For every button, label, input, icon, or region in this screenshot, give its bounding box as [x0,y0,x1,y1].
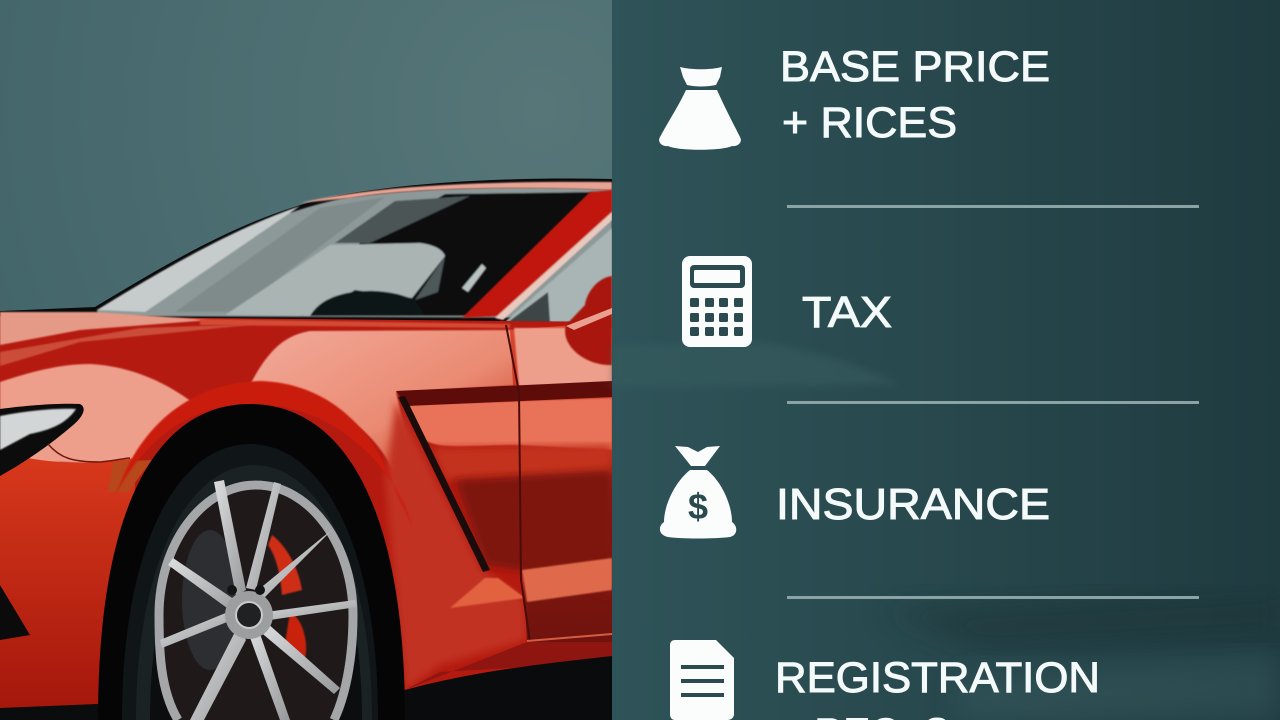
sill [405,642,612,690]
row: insurance [660,446,1050,538]
spokes [160,480,357,720]
tire [122,444,378,720]
door [510,322,612,650]
body base [0,316,612,710]
wheel arch outer [115,381,412,525]
door stripe [396,381,612,406]
heading: base price: BASE PRICE [780,43,1050,91]
car body [0,312,612,720]
fender [250,330,520,540]
side vent line [398,396,490,572]
ghost car reflection [612,342,900,388]
row: base price [659,43,1050,150]
right panel [612,0,1280,720]
headlight [0,404,152,492]
row: tax [682,256,892,347]
icon: money bag [660,446,736,538]
wheel arch [98,404,405,720]
brake caliper [268,535,302,595]
car photo [0,179,612,720]
rear lower fender [385,400,527,690]
ground shadow [0,704,98,720]
brake disc [182,530,238,670]
text: + rices: + RICES [782,99,957,147]
rim [164,564,348,690]
icon: document [670,640,734,720]
dollar sign: $ [688,486,708,527]
bumper vent [0,585,30,640]
mirror [565,276,612,365]
hood [0,312,210,345]
hub [225,591,273,639]
car silhouette [0,179,612,720]
front bumper [0,452,135,708]
roof edge highlight [300,182,612,203]
heading: insurance: INSURANCE [776,480,1050,529]
icon: sack [659,67,741,150]
windshield [97,188,612,318]
icon: calculator [682,256,752,347]
heading: tax: TAX [802,288,892,337]
background [0,0,612,720]
panel background [612,0,1280,720]
dark bottom shading [880,590,1280,650]
row: registration [670,640,1100,720]
left fender highlight [0,364,192,472]
wheel [98,381,412,720]
side window and A-pillar [462,190,612,322]
door seam [506,325,530,642]
orange side marker [108,460,152,492]
heading: registration: REGISTRATION [775,654,1100,702]
